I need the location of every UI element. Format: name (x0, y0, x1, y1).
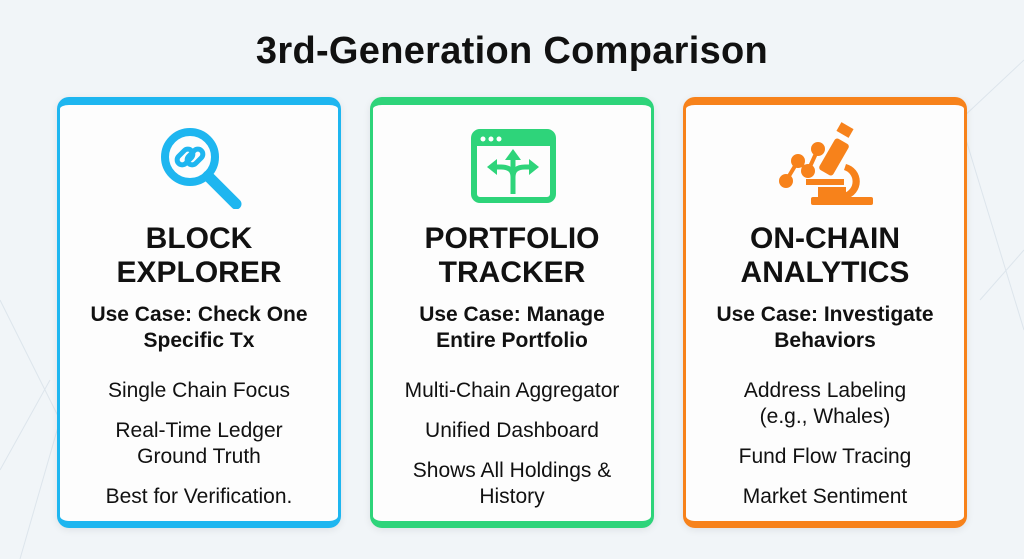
icon: magnifier with chain link (161, 128, 242, 209)
features: Single Chain Focus (108, 379, 290, 402)
title: 3rd-Generation Comparison (256, 30, 768, 72)
use case: Use Case: Investigate (716, 303, 934, 326)
panel: on-chain analytics (683, 97, 967, 528)
heading: TRACKER (439, 256, 585, 289)
use case: Behaviors (774, 329, 876, 352)
heading: ON-CHAIN (750, 222, 900, 255)
panel: block explorer: Best for Verification. (106, 485, 292, 508)
panel: portfolio tracker (370, 97, 654, 528)
heading (116, 222, 282, 289)
heading (741, 222, 909, 289)
panel: portfolio tracker: Shows All Holdings & (413, 459, 611, 482)
use case: Use Case: Manage (419, 303, 605, 326)
panel: block explorer: Ground Truth (137, 445, 261, 468)
use case: Entire Portfolio (436, 329, 588, 352)
features: Multi-Chain Aggregator (405, 379, 619, 402)
use case: Specific Tx (144, 329, 254, 352)
panel: block explorer (57, 97, 341, 528)
use case (716, 303, 934, 352)
heading (424, 222, 600, 289)
icon: microscope with chart (779, 122, 873, 205)
panel: on-chain analytics: Market Sentiment (743, 485, 907, 508)
use case (90, 303, 308, 352)
heading: PORTFOLIO (424, 222, 600, 255)
features: Address Labeling (744, 379, 906, 402)
heading: EXPLORER (116, 256, 282, 289)
use case (419, 303, 605, 352)
panel: on-chain analytics: Fund Flow Tracing (739, 445, 911, 468)
heading: BLOCK (146, 222, 252, 255)
use case: Use Case: Check One (90, 303, 308, 326)
heading: ANALYTICS (741, 256, 909, 289)
panel: portfolio tracker: History (479, 485, 545, 508)
features (744, 379, 906, 428)
features: (e.g., Whales) (760, 405, 890, 428)
panel: block explorer: Real-Time Ledger (115, 419, 283, 442)
icon: browser window with arrows (471, 129, 556, 203)
panel: portfolio tracker: Unified Dashboard (425, 419, 599, 442)
